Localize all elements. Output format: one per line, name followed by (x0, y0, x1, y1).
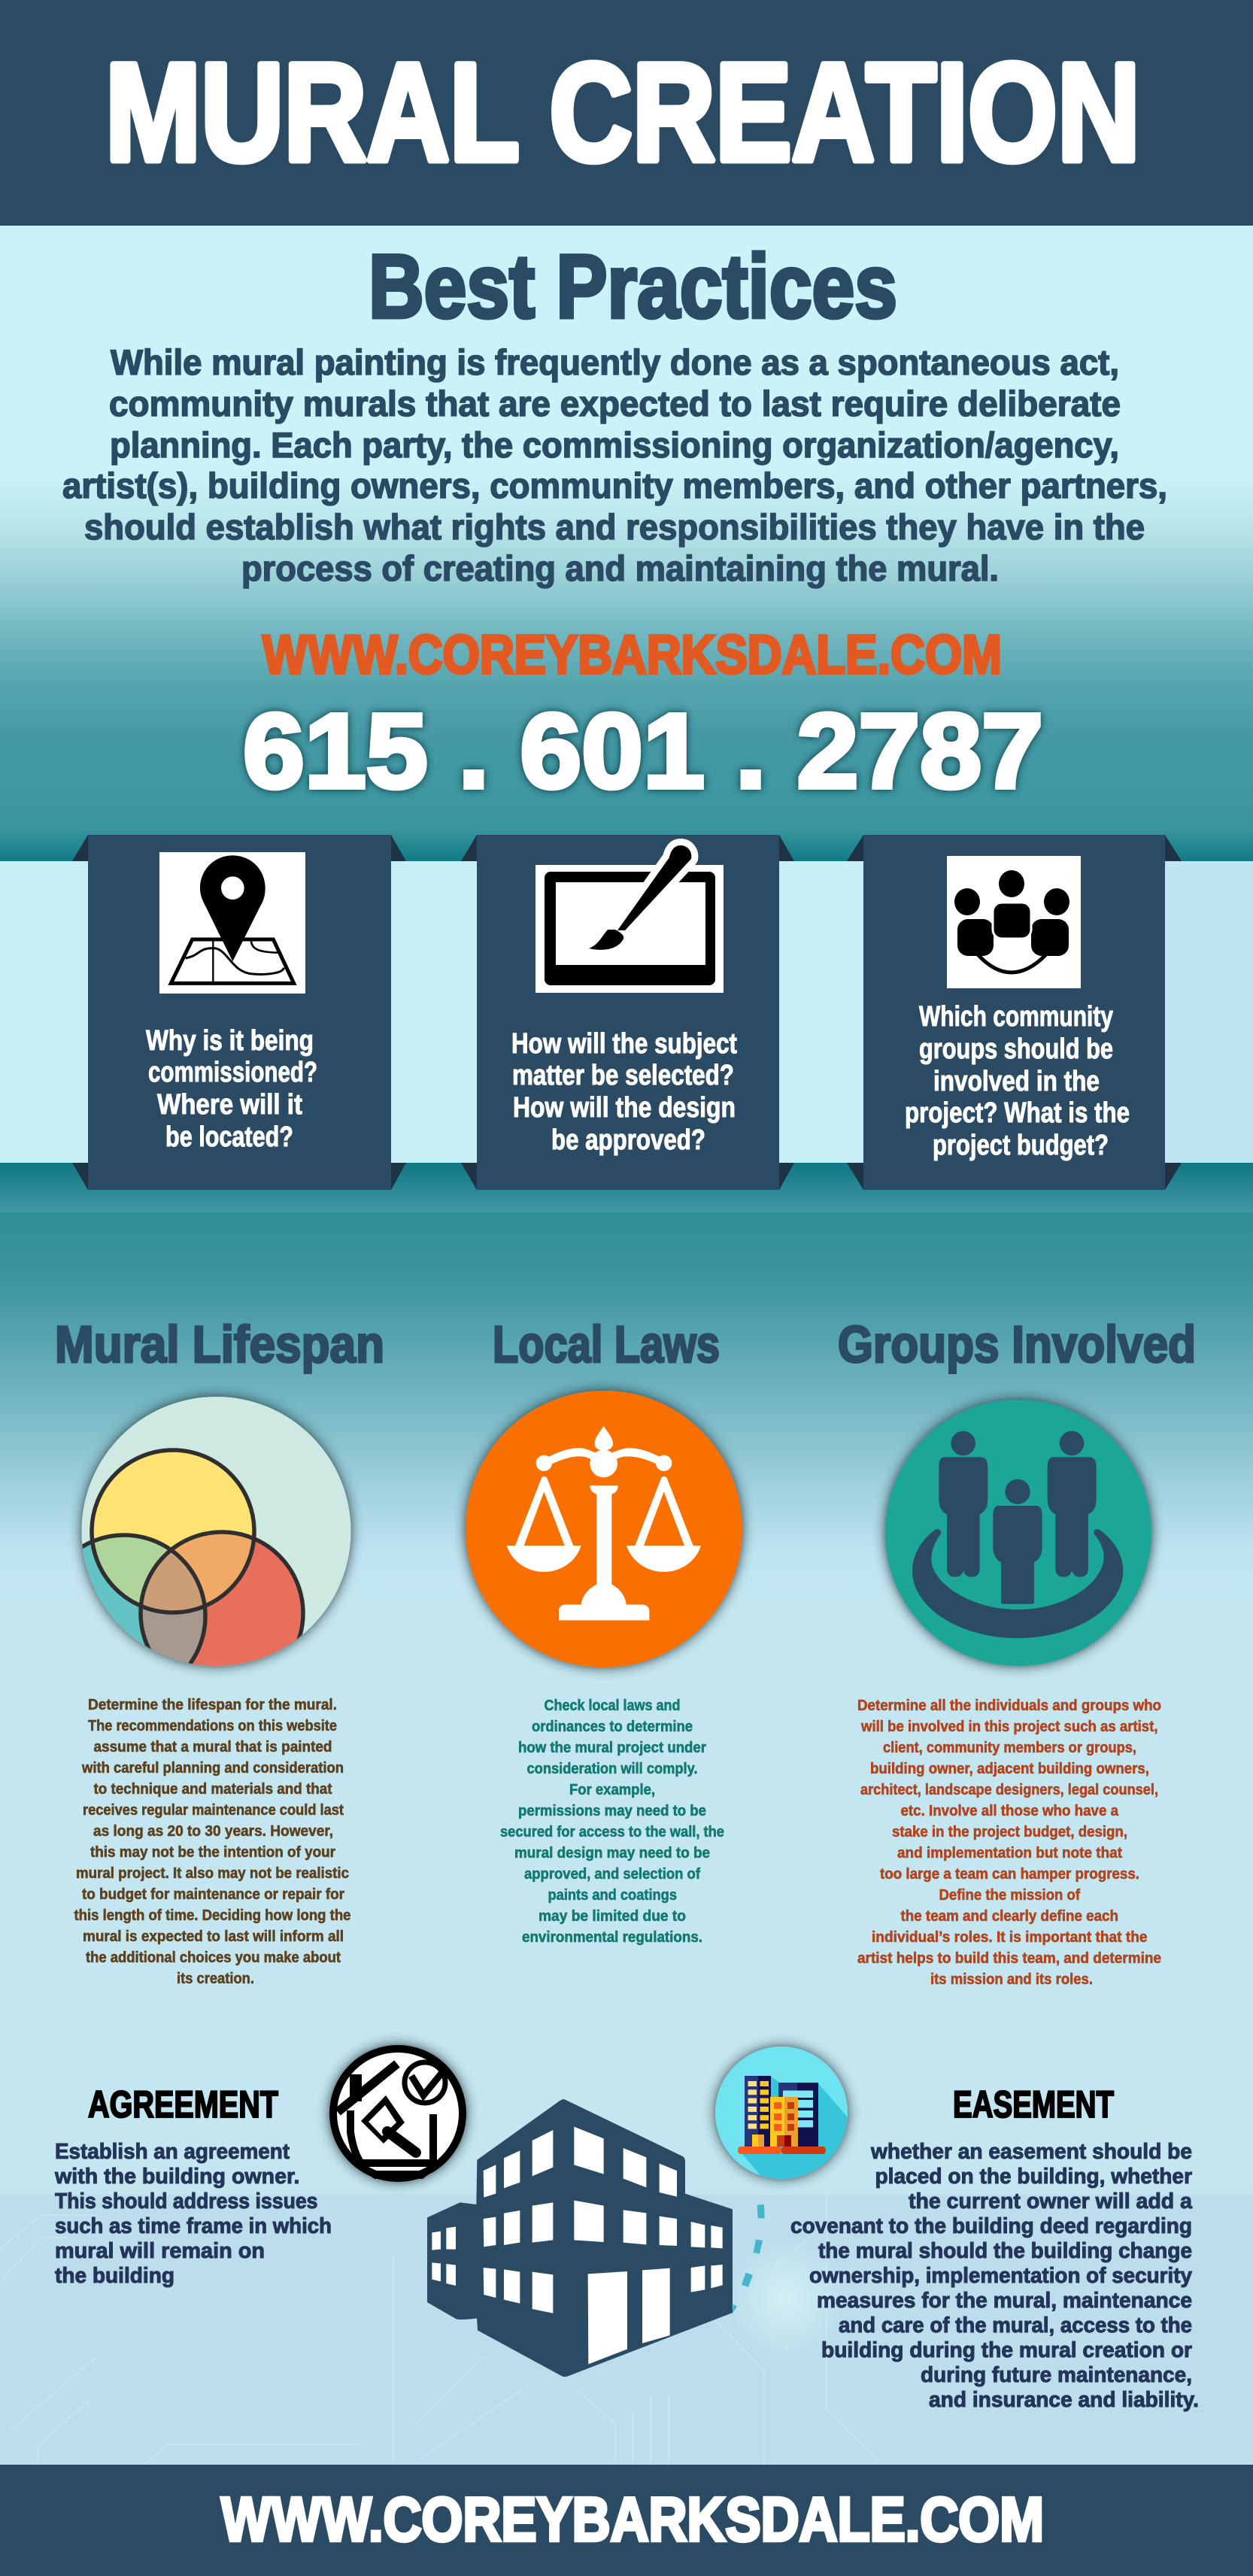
intro text block: artist(s), building owners, community members, and other partners, (62, 466, 1167, 505)
footer band (0, 2465, 1253, 2576)
text block: local laws: approved, and selection of (524, 1866, 700, 1883)
text block: local laws: environmental regulations. (522, 1929, 702, 1946)
intro text block: process of creating and maintaining the mural. (241, 548, 999, 588)
text block: local laws: For example, (569, 1782, 655, 1798)
text block: local laws (500, 1698, 724, 1946)
heading: Groups Involved: Groups Involved (838, 1315, 1196, 1373)
card 2 question: How will the subject (511, 1028, 737, 1060)
text block: easement: ownership, implementation of security (809, 2264, 1192, 2288)
panel: question card 2 (461, 835, 794, 1190)
icon: easement city buildings (715, 2047, 857, 2181)
heading: Best Practices: Best Practices (369, 236, 897, 337)
card 1 question: Why is it being (146, 1025, 314, 1057)
text block: mural lifespan (74, 1697, 350, 1987)
text block: local laws: consideration will comply. (526, 1761, 698, 1777)
heading: Mural Lifespan: Mural Lifespan (55, 1315, 384, 1373)
text block: groups involved: the team and clearly define each (901, 1908, 1118, 1925)
card 1 question (146, 1025, 317, 1153)
card 3 question (905, 1001, 1130, 1161)
card 3 question: Which community (919, 1001, 1113, 1033)
icon: central building (427, 2099, 765, 2377)
text block: groups involved: building owner, adjacent building owners, (870, 1761, 1149, 1777)
header band (0, 0, 1253, 226)
heading: AGREEMENT: AGREEMENT (88, 2083, 278, 2125)
text block: local laws: permissions may need to be (518, 1803, 706, 1819)
phone number: 615 . 601 . 2787 (243, 691, 1043, 810)
text block: easement: the mural should the building change (818, 2239, 1192, 2263)
text block: mural lifespan: to budget for maintenance or repair for (82, 1886, 344, 1903)
text block: easement: covenant to the building deed regarding (790, 2214, 1192, 2238)
icon: scales of justice circle (466, 1391, 742, 1667)
icon: community group (947, 856, 1081, 988)
text block: groups involved: artist helps to build this team, and determine (857, 1950, 1161, 1967)
card 2 question (511, 1028, 737, 1156)
text block: mural lifespan: this length of time. Deciding how long the (74, 1907, 350, 1924)
text block: agreement: such as time frame in which (55, 2214, 332, 2238)
text block: groups involved: Determine all the individuals and groups who (857, 1698, 1161, 1714)
intro text block (62, 342, 1167, 588)
text block: local laws: ordinances to determine (532, 1719, 693, 1735)
panel: question card 3 (847, 835, 1182, 1190)
text block: easement (790, 2140, 1199, 2412)
text block: easement: whether an easement should be (870, 2140, 1192, 2164)
intro text block: should establish what rights and responsibilities they have in the (84, 507, 1145, 547)
text block: mural lifespan: as long as 20 to 30 years. However, (93, 1823, 333, 1840)
icon: map pin (159, 852, 305, 994)
text block: mural lifespan: mural project. It also may not be realistic (76, 1865, 349, 1882)
text block: groups involved: individual’s roles. It is important that the (872, 1929, 1148, 1946)
text block: mural lifespan: its creation. (177, 1971, 254, 1987)
text block: groups involved: architect, landscape designers, legal counsel, (860, 1782, 1158, 1798)
text block: agreement: Establish an agreement (55, 2140, 290, 2164)
card 3 question: project? What is the (905, 1097, 1130, 1129)
text block: mural lifespan: the additional choices you make about (86, 1949, 341, 1966)
text block: local laws: Check local laws and (545, 1698, 680, 1714)
intro text block: planning. Each party, the commissioning organization/agency, (110, 425, 1119, 465)
text block: easement: and insurance and liability. (929, 2388, 1199, 2412)
card 3 question: involved in the (933, 1066, 1100, 1097)
heading: EASEMENT: EASEMENT (953, 2083, 1114, 2125)
card 1 question: commissioned? (148, 1057, 317, 1088)
text block: easement: and care of the mural, access to the (839, 2314, 1192, 2338)
card 3 question: project budget? (933, 1130, 1109, 1161)
text block: local laws: may be limited due to (539, 1908, 686, 1925)
intro text block: community murals that are expected to last require deliberate (109, 384, 1121, 423)
text block: mural lifespan: this may not be the intention of your (90, 1844, 335, 1861)
icon: agreement house and brush (333, 2049, 463, 2179)
text block: easement: placed on the building, whether (875, 2165, 1192, 2189)
text block: agreement: This should address issues (55, 2189, 317, 2213)
text block: easement: measures for the mural, maintenance (817, 2289, 1192, 2313)
heading: Local Laws: Local Laws (493, 1315, 720, 1373)
text block: groups involved: its mission and its roles. (930, 1971, 1093, 1988)
text block: groups involved: etc. Involve all those who have a (901, 1803, 1119, 1819)
text block: agreement: the building (55, 2264, 174, 2288)
text block: mural lifespan: The recommendations on this website (88, 1718, 337, 1734)
text block: agreement: with the building owner. (54, 2165, 299, 2189)
website link orange: WWW.COREYBARKSDALE.COM (262, 625, 1002, 685)
text block: groups involved (857, 1698, 1161, 1988)
card 2 question: matter be selected? (512, 1060, 734, 1091)
text block: easement: the current owner will add a (909, 2189, 1193, 2213)
card 1 question: Where will it (157, 1089, 302, 1121)
text block: local laws: mural design may need to be (514, 1845, 710, 1861)
footer website: WWW.COREYBARKSDALE.COM (221, 2484, 1044, 2554)
text block: local laws: secured for access to the wall, the (500, 1824, 724, 1840)
text block: local laws: how the mural project under (518, 1740, 706, 1756)
text block: mural lifespan: mural is expected to last will inform all (83, 1928, 344, 1945)
icon: people group circle (885, 1400, 1151, 1666)
intro text block: While mural painting is frequently done as a spontaneous act, (111, 342, 1119, 382)
text block: groups involved: Define the mission of (939, 1887, 1080, 1904)
text block: easement: building during the mural creation or (821, 2338, 1192, 2362)
text block: mural lifespan: to technique and materials and that (93, 1781, 332, 1798)
text block: groups involved: client, community members or groups, (883, 1740, 1136, 1756)
text block: groups involved: and implementation but note that (897, 1845, 1122, 1861)
text block: mural lifespan: Determine the lifespan for the mural. (88, 1697, 337, 1713)
card 1 question: be located? (165, 1121, 293, 1153)
text block: groups involved: will be involved in this project such as artist, (860, 1719, 1158, 1735)
icon: venn diagram circle (43, 1397, 350, 1698)
card 2 question: How will the design (513, 1092, 736, 1124)
text block: easement: during future maintenance, (921, 2363, 1192, 2387)
text block: mural lifespan: assume that a mural that is painted (93, 1739, 332, 1755)
panel: question card 1 (72, 835, 406, 1190)
text block: agreement (54, 2140, 332, 2288)
text block: local laws: paints and coatings (548, 1887, 677, 1904)
icon: tablet and paintbrush (535, 845, 724, 993)
text block: mural lifespan: receives regular maintenance could last (83, 1802, 344, 1819)
text block: agreement: mural will remain on (55, 2239, 265, 2263)
card 2 question: be approved? (551, 1124, 705, 1156)
text block: groups involved: too large a team can hamper progress. (880, 1866, 1139, 1883)
card 3 question: groups should be (919, 1033, 1113, 1065)
text block: groups involved: stake in the project budget, design, (892, 1824, 1127, 1840)
text block: mural lifespan: with careful planning and consideration (81, 1760, 344, 1776)
